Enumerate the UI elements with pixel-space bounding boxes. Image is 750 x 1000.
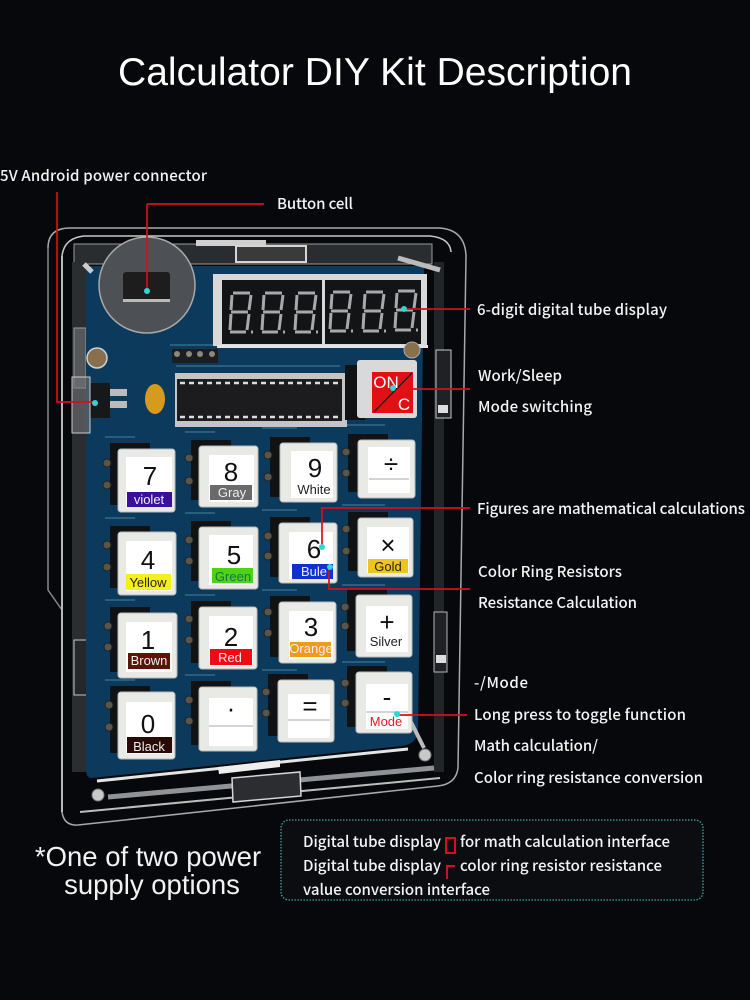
key 8: 8 — [224, 457, 238, 487]
key plus: Silver — [370, 634, 403, 649]
key 3: 3 — [304, 612, 318, 642]
button cell holder — [99, 237, 195, 333]
power supply note: supply options — [64, 869, 240, 900]
key 0 — [105, 686, 175, 759]
label: long press: Long press to toggle function — [474, 704, 686, 725]
key 9 — [264, 437, 337, 502]
key 8: Gray — [218, 485, 247, 500]
key 9: 9 — [308, 453, 322, 483]
key 7: 7 — [143, 461, 157, 491]
key 5 — [185, 521, 258, 589]
key 6: Bule — [301, 564, 327, 579]
key 5: Green — [215, 569, 251, 584]
key 3 — [264, 596, 336, 663]
key multiply — [342, 512, 413, 577]
callout lines — [57, 192, 470, 717]
title: Calculator DIY Kit Description — [118, 51, 632, 94]
on/c key: ON — [373, 373, 399, 392]
key 9: White — [297, 482, 331, 497]
key plus — [341, 589, 412, 657]
key plus: + — [379, 607, 395, 637]
label: math calculation: Math calculation/ — [474, 735, 598, 756]
key multiply: Gold — [374, 559, 402, 574]
corner screws — [84, 258, 440, 801]
6-digit digital tube display — [213, 274, 428, 348]
key minus mode — [341, 666, 412, 733]
label: color ring resistors: Color Ring Resistors — [478, 561, 622, 582]
key dot: · — [227, 693, 235, 723]
power connector — [72, 377, 127, 433]
label: display: 6-digit digital tube display — [477, 299, 667, 320]
key 4: Yellow — [129, 575, 167, 590]
screw post — [87, 348, 107, 368]
key 7: violet — [134, 492, 165, 507]
key minus mode: - — [383, 682, 391, 712]
icon: red zero segment — [446, 838, 455, 853]
key equals — [262, 674, 334, 742]
label: work sleep: Work/Sleep — [478, 365, 562, 386]
panel: display modes: for math calculation interface — [460, 831, 670, 852]
panel: display modes: color ring resistor resistance — [460, 855, 662, 876]
circuit board — [86, 266, 424, 778]
key 5: 5 — [227, 540, 241, 570]
key 3: Orange — [289, 641, 333, 656]
label: button cell: Button cell — [277, 193, 353, 214]
board traces — [105, 345, 385, 680]
label: resistance calculation: Resistance Calculation — [478, 592, 637, 613]
key 1: Brown — [131, 653, 167, 668]
key divide: ÷ — [384, 449, 398, 479]
on/c key — [345, 360, 417, 420]
panel: display modes: Digital tube display — [303, 831, 441, 852]
key 8 — [185, 440, 258, 507]
keypad — [103, 434, 415, 759]
key 0: 0 — [141, 709, 155, 739]
key equals: = — [302, 691, 318, 721]
key divide — [342, 434, 415, 498]
key 1 — [104, 607, 177, 678]
bottom connector tab — [232, 772, 301, 802]
key 4 — [103, 526, 176, 595]
capacitor — [145, 384, 165, 414]
panel: display modes: value conversion interface — [303, 879, 490, 900]
key 2: 2 — [224, 622, 238, 652]
label: figures: Figures are mathematical calculations — [477, 498, 745, 519]
key 2: Red — [218, 650, 242, 665]
key 4: 4 — [141, 545, 155, 575]
screw post right — [404, 342, 420, 358]
label: mode: -/Mode — [474, 672, 528, 693]
key 7 — [103, 443, 175, 512]
acrylic case — [48, 228, 466, 825]
key minus mode: Mode — [370, 714, 402, 729]
label: color ring conversion: Color ring resistance conversion — [474, 767, 703, 788]
icon: red r segment — [447, 866, 455, 879]
key dot — [185, 681, 257, 751]
key multiply: × — [380, 530, 396, 560]
chip — [175, 373, 347, 427]
on/c key: C — [398, 395, 410, 414]
white tab — [218, 760, 280, 774]
key 1: 1 — [141, 625, 155, 655]
header pins — [172, 349, 218, 363]
key 2 — [185, 601, 257, 669]
panel: display modes: Digital tube display — [303, 855, 441, 876]
key 0: Black — [133, 739, 165, 754]
label: power connector: 5V Android power connector — [0, 165, 208, 186]
power supply note: *One of two power — [35, 841, 261, 872]
label: mode switching: Mode switching — [478, 396, 592, 417]
key 6 — [264, 517, 337, 583]
key 6: 6 — [307, 534, 321, 564]
panel: display modes — [281, 820, 703, 900]
